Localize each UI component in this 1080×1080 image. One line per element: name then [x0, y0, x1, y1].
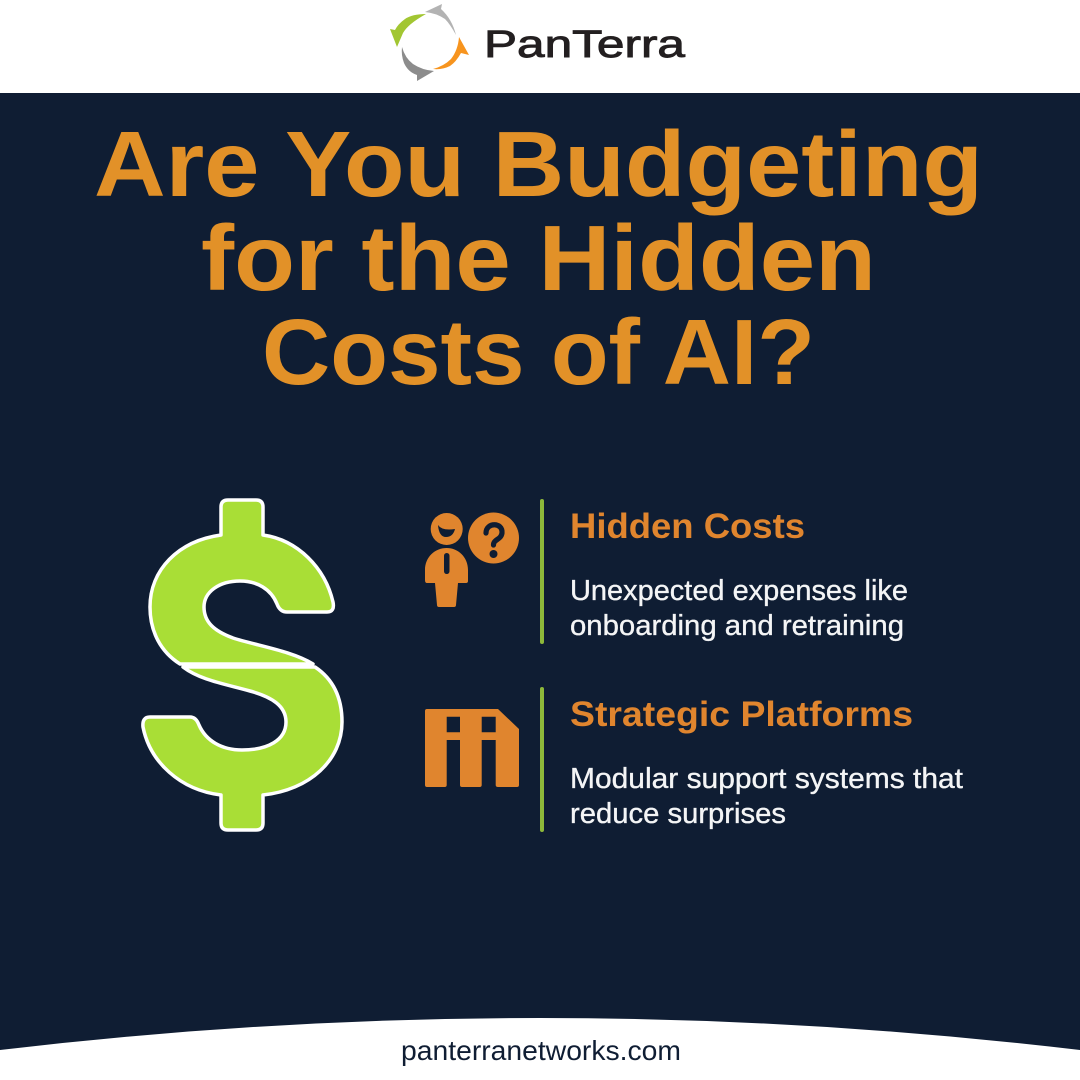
footer website address: panterranetworks.com [401, 1035, 681, 1066]
text: strategic platforms description: Modular support systems that [570, 763, 963, 795]
icon: logo green arrow [390, 14, 426, 47]
icon: logo light gray arrow [425, 4, 456, 35]
icon: modular building blocks [425, 709, 519, 787]
text: hidden costs description [570, 575, 908, 642]
title [94, 112, 983, 404]
title: for the Hidden [201, 206, 876, 310]
logo wordmark: PanTerra [484, 24, 686, 66]
logo: PanTerra [390, 4, 686, 81]
text: hidden costs description: onboarding and retraining [570, 610, 904, 642]
panel: strategic platforms [425, 687, 963, 832]
heading: strategic platforms: Strategic Platforms [570, 695, 913, 734]
icon: person with question mark [425, 512, 519, 607]
divider bar: hidden costs [540, 499, 544, 644]
text: strategic platforms description: reduce surprises [570, 798, 786, 830]
icon: green dollar sign [143, 500, 342, 830]
text: strategic platforms description [570, 763, 963, 830]
heading: hidden costs: Hidden Costs [570, 507, 805, 546]
icon: logo orange arrow [433, 37, 469, 69]
panel: hidden costs [425, 499, 908, 644]
icon: logo dark gray arrow [402, 47, 434, 81]
title: Are You Budgeting [94, 112, 983, 216]
title: Costs of AI? [262, 300, 815, 404]
text: hidden costs description: Unexpected expenses like [570, 575, 908, 607]
divider bar: strategic platforms [540, 687, 544, 832]
